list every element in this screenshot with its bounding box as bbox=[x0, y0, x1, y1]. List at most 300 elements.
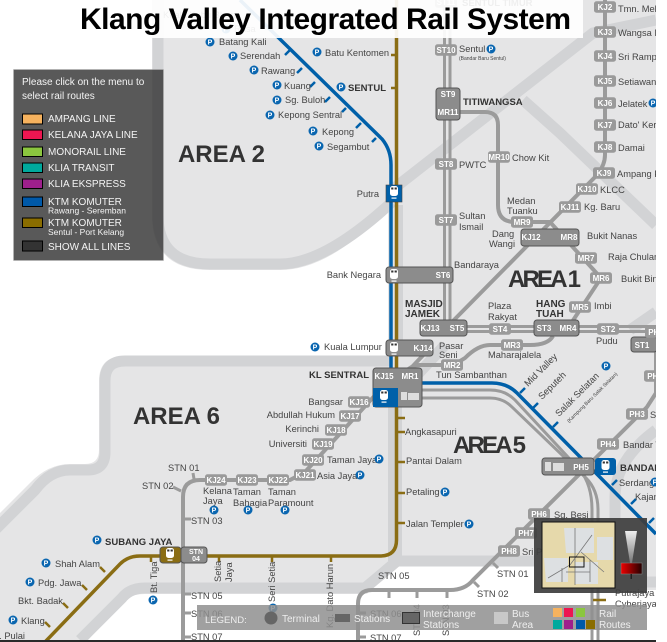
KJ2 bbox=[594, 1, 616, 13]
rail line: KTM Rawang Seremban (blue) bbox=[240, 0, 656, 534]
station names: (Kampung Baru Salak Selatan) bbox=[566, 371, 619, 424]
menu item: Monorail: MONORAIL LINE bbox=[48, 147, 126, 158]
station names: Setia bbox=[213, 560, 223, 582]
KJ8 bbox=[594, 141, 616, 153]
interchange: Bukit Nanas: KJ12 bbox=[521, 233, 541, 242]
KJ4: KJ4 bbox=[598, 52, 613, 61]
station names: Serendah bbox=[240, 51, 280, 61]
menu item: Show all: SHOW ALL LINES bbox=[48, 242, 131, 253]
station names: Jaya bbox=[224, 562, 234, 582]
KJ8: KJ8 bbox=[598, 143, 613, 152]
PH1: PH1 bbox=[648, 328, 664, 337]
KJ24 bbox=[205, 474, 227, 486]
ST8 bbox=[435, 158, 457, 170]
station names: STN 02 bbox=[142, 481, 174, 491]
menu item: KLIA Ekspress: KLIA EKSPRESS bbox=[48, 179, 126, 190]
station names: Paramount bbox=[268, 498, 314, 508]
menu item: Ampang: AMPANG LINE bbox=[48, 114, 116, 125]
interchange: Titiwangsa: MR11 bbox=[438, 108, 459, 117]
PH3: PH3 bbox=[629, 410, 645, 419]
interchange station names: TUAH bbox=[536, 309, 564, 320]
station names: Kg. Dato Harun bbox=[325, 564, 335, 628]
station names: Tuanku bbox=[507, 206, 538, 216]
legend band: Interchange bbox=[423, 609, 476, 620]
station names: Pdg. Jawa bbox=[38, 578, 82, 588]
MR5: MR5 bbox=[572, 303, 589, 312]
station names: Damai bbox=[618, 143, 645, 153]
P: P bbox=[252, 68, 257, 74]
KJ10: KJ10 bbox=[577, 185, 597, 194]
KJ16: KJ16 bbox=[349, 398, 369, 407]
station names: Tun Sambanthan bbox=[436, 370, 507, 380]
KJ11 bbox=[559, 201, 581, 213]
station names: STN 02 bbox=[477, 589, 509, 599]
KJ22 bbox=[267, 474, 289, 486]
station names: Taman bbox=[233, 487, 261, 497]
station names: Bangsar bbox=[308, 397, 343, 407]
interchange: Subang Jaya bbox=[160, 547, 207, 563]
PH4 bbox=[597, 438, 619, 450]
station names: Rasa bbox=[234, 24, 257, 34]
P bbox=[92, 536, 102, 544]
rail line: Sri Petaling and Ampang double track bbox=[358, 0, 656, 642]
station names: Kuala Lumpur bbox=[324, 342, 382, 352]
P: P bbox=[283, 508, 288, 514]
title: Klang Valley Integrated Rail System bbox=[80, 3, 571, 36]
KJ3: KJ3 bbox=[598, 28, 613, 37]
station names: Wangi bbox=[489, 239, 515, 249]
ST4 bbox=[489, 323, 511, 335]
station names: Ismail bbox=[459, 222, 483, 232]
station names: Bahagia bbox=[233, 498, 268, 508]
MR2: MR2 bbox=[444, 361, 461, 370]
P bbox=[374, 454, 384, 464]
interchange: Kuala Lumpur: KJ14 bbox=[413, 344, 433, 353]
menu item: KTM Sentul: KTM KOMUTER bbox=[48, 218, 122, 229]
interchange: Bank Negara: ST6 bbox=[436, 271, 451, 280]
P bbox=[210, 506, 218, 514]
interchange station names: SENTUL bbox=[348, 83, 386, 94]
station names: Klang bbox=[21, 616, 45, 626]
P: P bbox=[489, 46, 494, 54]
P: P bbox=[268, 112, 273, 120]
station names: Taman bbox=[268, 487, 296, 497]
KJ6: KJ6 bbox=[598, 99, 613, 108]
PH6: PH6 bbox=[531, 510, 547, 519]
station names: (Bandar Baru Sentul) bbox=[459, 56, 506, 62]
P: P bbox=[651, 100, 656, 108]
station names: S bbox=[650, 410, 656, 420]
ST10: ST10 bbox=[436, 46, 456, 55]
station names: Kepong Sentral bbox=[278, 110, 342, 120]
station names: Bandaraya bbox=[454, 260, 500, 270]
station names: Bt. Tiga bbox=[149, 561, 159, 593]
P bbox=[280, 506, 290, 514]
station names: STN 05 bbox=[378, 571, 410, 581]
station names: STN 03 bbox=[191, 516, 223, 526]
MR6 bbox=[590, 272, 612, 284]
legend band: Area bbox=[512, 620, 534, 631]
P: P bbox=[224, 26, 229, 34]
P: P bbox=[443, 490, 448, 496]
station names: STN 01 bbox=[497, 569, 529, 579]
KJ23 bbox=[236, 474, 258, 486]
legend band: Stations bbox=[423, 620, 459, 631]
P: P bbox=[467, 522, 472, 528]
P: P bbox=[311, 128, 316, 136]
interchange: Putra bbox=[386, 185, 402, 202]
station names: Tmn. Melati bbox=[618, 4, 667, 14]
station names: Jelatek bbox=[618, 99, 648, 109]
P bbox=[272, 96, 282, 104]
station names: Kerinchi bbox=[285, 424, 319, 434]
MR3: MR3 bbox=[504, 341, 521, 350]
P: P bbox=[275, 82, 280, 90]
interchange: Titiwangsa: ST9 bbox=[441, 90, 456, 99]
MR9 bbox=[511, 216, 533, 228]
station names: Pasar bbox=[439, 341, 463, 351]
station names: Raja Chulan bbox=[608, 252, 659, 262]
station names: Chow Kit bbox=[512, 153, 550, 163]
KJ18: KJ18 bbox=[326, 426, 346, 435]
menu item: KTM Rawang bbox=[22, 197, 126, 216]
P: P bbox=[44, 560, 49, 568]
menu panel: select rail routes bbox=[22, 91, 95, 102]
station names: STN 07 bbox=[191, 632, 223, 642]
P: P bbox=[315, 50, 320, 56]
station names: Putrajaya & bbox=[615, 588, 664, 598]
P bbox=[148, 596, 158, 604]
P bbox=[42, 558, 50, 568]
KJ21: KJ21 bbox=[295, 471, 315, 480]
P: P bbox=[653, 480, 658, 486]
PH7: PH7 bbox=[518, 529, 534, 538]
interchange station names: HANG bbox=[536, 299, 566, 310]
station names: Cyberjaya bbox=[615, 599, 658, 609]
interchange station names: JAMEK bbox=[405, 309, 441, 320]
station names: Pudu bbox=[596, 336, 618, 346]
mini map navigator bbox=[534, 518, 647, 593]
P: P bbox=[95, 538, 100, 544]
PH2 bbox=[644, 370, 666, 382]
P bbox=[266, 110, 274, 120]
interchange: Hang Tuah: ST3 bbox=[537, 324, 552, 333]
menu item: KTM Sentul: Sentul - Port Kelang bbox=[48, 227, 124, 237]
menu item: Show all bbox=[22, 241, 131, 253]
interchange: Bukit Nanas: MR8 bbox=[561, 233, 578, 242]
menu item: KTM Sentul bbox=[22, 218, 124, 237]
P bbox=[222, 24, 230, 34]
P bbox=[440, 488, 450, 496]
KJ9 bbox=[593, 167, 615, 179]
ST8: ST8 bbox=[439, 160, 454, 169]
interchange: KL Sentral: MR1 bbox=[402, 372, 419, 381]
ST7 bbox=[435, 214, 457, 226]
menu item: KLIA Transit: KLIA TRANSIT bbox=[48, 163, 115, 174]
KJ19 bbox=[312, 438, 334, 450]
MR5 bbox=[569, 301, 591, 313]
legend band: LEGEND: bbox=[205, 615, 247, 626]
interchange: Masjid Jamek: KJ13 bbox=[420, 324, 440, 333]
menu panel bbox=[14, 70, 164, 260]
PH1 bbox=[645, 326, 667, 338]
station names: Seni bbox=[439, 350, 458, 360]
KJ5: KJ5 bbox=[598, 77, 613, 86]
rail line: Sri Petaling line ticks bbox=[358, 563, 498, 637]
station names: Rakyat bbox=[488, 312, 517, 322]
KJ11: KJ11 bbox=[561, 203, 580, 212]
KJ16 bbox=[348, 396, 370, 408]
interchange station names: TITIWANGSA bbox=[463, 97, 523, 108]
station names: Kuang bbox=[284, 81, 311, 91]
ST10 bbox=[435, 44, 457, 56]
KJ3 bbox=[594, 26, 616, 38]
station names: Batu Kentomen bbox=[325, 48, 389, 58]
station names: Pantai Dalam bbox=[406, 456, 462, 466]
P: P bbox=[208, 40, 213, 46]
station names: Angkasapuri bbox=[405, 427, 457, 437]
P: P bbox=[28, 580, 33, 586]
PH3 bbox=[626, 408, 648, 420]
PH8: PH8 bbox=[501, 547, 517, 556]
KJ6 bbox=[594, 97, 616, 109]
area labels: AREA 6 bbox=[133, 403, 220, 430]
ST7: ST7 bbox=[439, 216, 454, 225]
interchange station names: SUBANG JAYA bbox=[105, 537, 173, 548]
station names: Bkt. Badak bbox=[18, 596, 63, 606]
P bbox=[272, 80, 282, 90]
station names: Kg. Baru bbox=[584, 202, 620, 212]
MR7 bbox=[575, 252, 597, 264]
station names: Segambut bbox=[327, 142, 370, 152]
PH8 bbox=[498, 545, 520, 557]
MR3 bbox=[501, 339, 523, 351]
PH2: PH2 bbox=[647, 372, 663, 381]
P: P bbox=[275, 98, 280, 104]
P bbox=[308, 126, 318, 136]
KJ19: KJ19 bbox=[313, 440, 333, 449]
rail line: Kelana Jaya bbox=[173, 0, 605, 642]
station names: Jaya bbox=[203, 496, 223, 506]
KJ23: KJ23 bbox=[237, 476, 257, 485]
P: P bbox=[377, 456, 382, 464]
menu item: KTM Rawang: Rawang - Seremban bbox=[48, 206, 126, 216]
station names: Sg. Besi bbox=[554, 510, 589, 520]
station names: STN 06 bbox=[370, 609, 402, 619]
station names: Sg. Buloh bbox=[285, 95, 325, 105]
KJ9: KJ9 bbox=[597, 169, 612, 178]
KJ7: KJ7 bbox=[598, 121, 613, 130]
P: P bbox=[212, 508, 217, 514]
interchange: Hang Tuah bbox=[534, 320, 579, 336]
legend band: Bus bbox=[512, 609, 529, 620]
interchange: KL Sentral: KJ15 bbox=[374, 372, 394, 381]
station names: STN 01 bbox=[168, 463, 200, 473]
P bbox=[312, 48, 322, 56]
ST2 bbox=[597, 323, 619, 335]
interchange: Masjid Jamek: ST5 bbox=[450, 324, 465, 333]
station names: Bank Negara bbox=[327, 270, 382, 280]
KJ21 bbox=[294, 469, 316, 481]
KJ18 bbox=[325, 424, 347, 436]
interchange: Masjid Jamek bbox=[420, 320, 467, 336]
ST4: ST4 bbox=[493, 325, 508, 334]
station names: Serdang bbox=[619, 478, 654, 488]
KJ22: KJ22 bbox=[268, 476, 288, 485]
station names: Rawang bbox=[261, 66, 295, 76]
KJ24: KJ24 bbox=[206, 476, 226, 485]
station names: STN 03 bbox=[441, 604, 451, 636]
right margin bbox=[656, 0, 667, 642]
legend band: Rail bbox=[599, 609, 616, 620]
station names: Kepong bbox=[322, 127, 354, 137]
ST2: ST2 bbox=[601, 325, 616, 334]
P bbox=[314, 142, 324, 150]
area labels: AREA 5 bbox=[453, 432, 526, 459]
interchange: Bank Negara bbox=[386, 267, 453, 283]
P bbox=[310, 342, 320, 352]
interchange: Bukit Nanas bbox=[521, 229, 579, 246]
P: P bbox=[11, 618, 16, 624]
legend band: Stations bbox=[354, 614, 390, 625]
MR2 bbox=[441, 359, 463, 371]
interchange: Kuala Lumpur bbox=[386, 340, 433, 356]
interchange station names bbox=[105, 83, 667, 548]
station names: Plaza bbox=[488, 301, 512, 311]
P bbox=[250, 66, 258, 74]
interchange: Titiwangsa bbox=[436, 88, 460, 120]
P: P bbox=[317, 144, 322, 150]
P: P bbox=[271, 606, 276, 612]
P bbox=[244, 506, 252, 514]
P: P bbox=[151, 598, 156, 604]
station names: Seputeh bbox=[536, 370, 568, 401]
area labels: AREA 2 bbox=[178, 141, 265, 168]
interchange: Bandar Tasik Selatan bbox=[542, 458, 616, 475]
interchange: ST1 bbox=[631, 337, 657, 352]
station names: STN 06 bbox=[191, 609, 223, 619]
interchange: KL Sentral bbox=[373, 368, 422, 407]
station names: Petaling bbox=[406, 487, 440, 497]
title backdrop bbox=[70, 0, 583, 38]
P bbox=[650, 478, 660, 486]
PH6 bbox=[528, 508, 550, 520]
station names: Sultan bbox=[459, 211, 485, 221]
MR6: MR6 bbox=[593, 274, 610, 283]
area labels: AREA 1 bbox=[508, 266, 581, 293]
station names: Bukit Nanas bbox=[587, 231, 637, 241]
P: P bbox=[246, 508, 251, 514]
KJ4 bbox=[594, 50, 616, 62]
station names: Sentul bbox=[459, 44, 485, 54]
station names: Asia Jaya bbox=[317, 471, 358, 481]
P: P bbox=[358, 472, 363, 480]
rail line: Monorail bbox=[405, 112, 601, 372]
station names: Seri Setia bbox=[267, 561, 277, 602]
station names: Putra bbox=[357, 189, 380, 199]
interchange: Subang Jaya: 04 bbox=[192, 556, 200, 563]
KJ7 bbox=[594, 119, 616, 131]
KJ20 bbox=[302, 454, 324, 466]
PH4: PH4 bbox=[600, 440, 616, 449]
P: P bbox=[339, 84, 344, 92]
P bbox=[464, 520, 474, 528]
interchange station names: MASJID bbox=[405, 299, 443, 310]
station names: Maharajalela bbox=[488, 350, 542, 360]
MR10: MR10 bbox=[488, 153, 510, 162]
station names: Taman Jaya bbox=[327, 455, 378, 465]
station names: Jalan Templer bbox=[406, 519, 464, 529]
P bbox=[26, 578, 34, 586]
station names: Abdullah Hukum bbox=[267, 410, 335, 420]
station names: Universiti bbox=[269, 439, 307, 449]
P: P bbox=[604, 364, 609, 370]
KJ17 bbox=[339, 410, 361, 422]
P bbox=[486, 44, 496, 54]
KJ5 bbox=[594, 75, 616, 87]
station names: Imbi bbox=[594, 301, 612, 311]
P: P bbox=[231, 54, 236, 60]
MR7: MR7 bbox=[578, 254, 595, 263]
KJ10 bbox=[576, 183, 598, 195]
KJ20: KJ20 bbox=[303, 456, 323, 465]
interchange: Subang Jaya: STN bbox=[189, 549, 203, 556]
interchange: Bandar Tasik Selatan: PH5 bbox=[573, 463, 589, 472]
KJ17: KJ17 bbox=[340, 412, 360, 421]
station pills bbox=[205, 1, 667, 557]
P bbox=[648, 98, 658, 108]
station names: Kuala Kubu Bharu bbox=[163, 10, 238, 20]
P bbox=[356, 470, 364, 480]
P: P bbox=[313, 344, 318, 352]
legend band: Routes bbox=[599, 620, 631, 631]
station names: Mid Valley bbox=[522, 351, 559, 388]
KJ2: KJ2 bbox=[598, 3, 613, 12]
station names: Medan bbox=[507, 196, 535, 206]
station names: STN 05 bbox=[191, 591, 223, 601]
area labels bbox=[133, 141, 581, 459]
P bbox=[268, 604, 278, 612]
station names: STN 04 bbox=[412, 604, 422, 636]
legend band bbox=[197, 605, 647, 631]
station names: Kajang bbox=[635, 492, 664, 502]
station names: Dang bbox=[492, 229, 514, 239]
station names: Sri P bbox=[522, 547, 542, 557]
station names: PWTC bbox=[459, 160, 487, 170]
interchange: Hang Tuah: MR4 bbox=[560, 324, 577, 333]
station names: Salak Selatan bbox=[553, 371, 601, 418]
interchange: ST1: ST1 bbox=[635, 341, 650, 350]
station names: Shah Alam bbox=[55, 559, 100, 569]
menu item: KTM Rawang: KTM KOMUTER bbox=[48, 197, 122, 208]
P bbox=[336, 82, 346, 92]
station names: Sri Rampai bbox=[618, 52, 664, 62]
station names: KLCC bbox=[600, 185, 625, 195]
PH7 bbox=[515, 527, 537, 539]
P bbox=[206, 38, 214, 46]
P bbox=[8, 616, 18, 624]
station names: Kelana bbox=[203, 486, 233, 496]
legend band: Terminal bbox=[282, 614, 320, 625]
interchange station names: KL SENTRAL bbox=[309, 370, 369, 381]
P bbox=[602, 362, 610, 370]
menu item: Kelana Jaya: KELANA JAYA LINE bbox=[48, 130, 138, 141]
P bbox=[228, 52, 238, 60]
bottom rule bbox=[0, 640, 656, 642]
MR9: MR9 bbox=[514, 218, 531, 227]
menu panel: Please click on the menu to bbox=[22, 77, 145, 88]
station names: Batang Kali bbox=[219, 37, 267, 47]
